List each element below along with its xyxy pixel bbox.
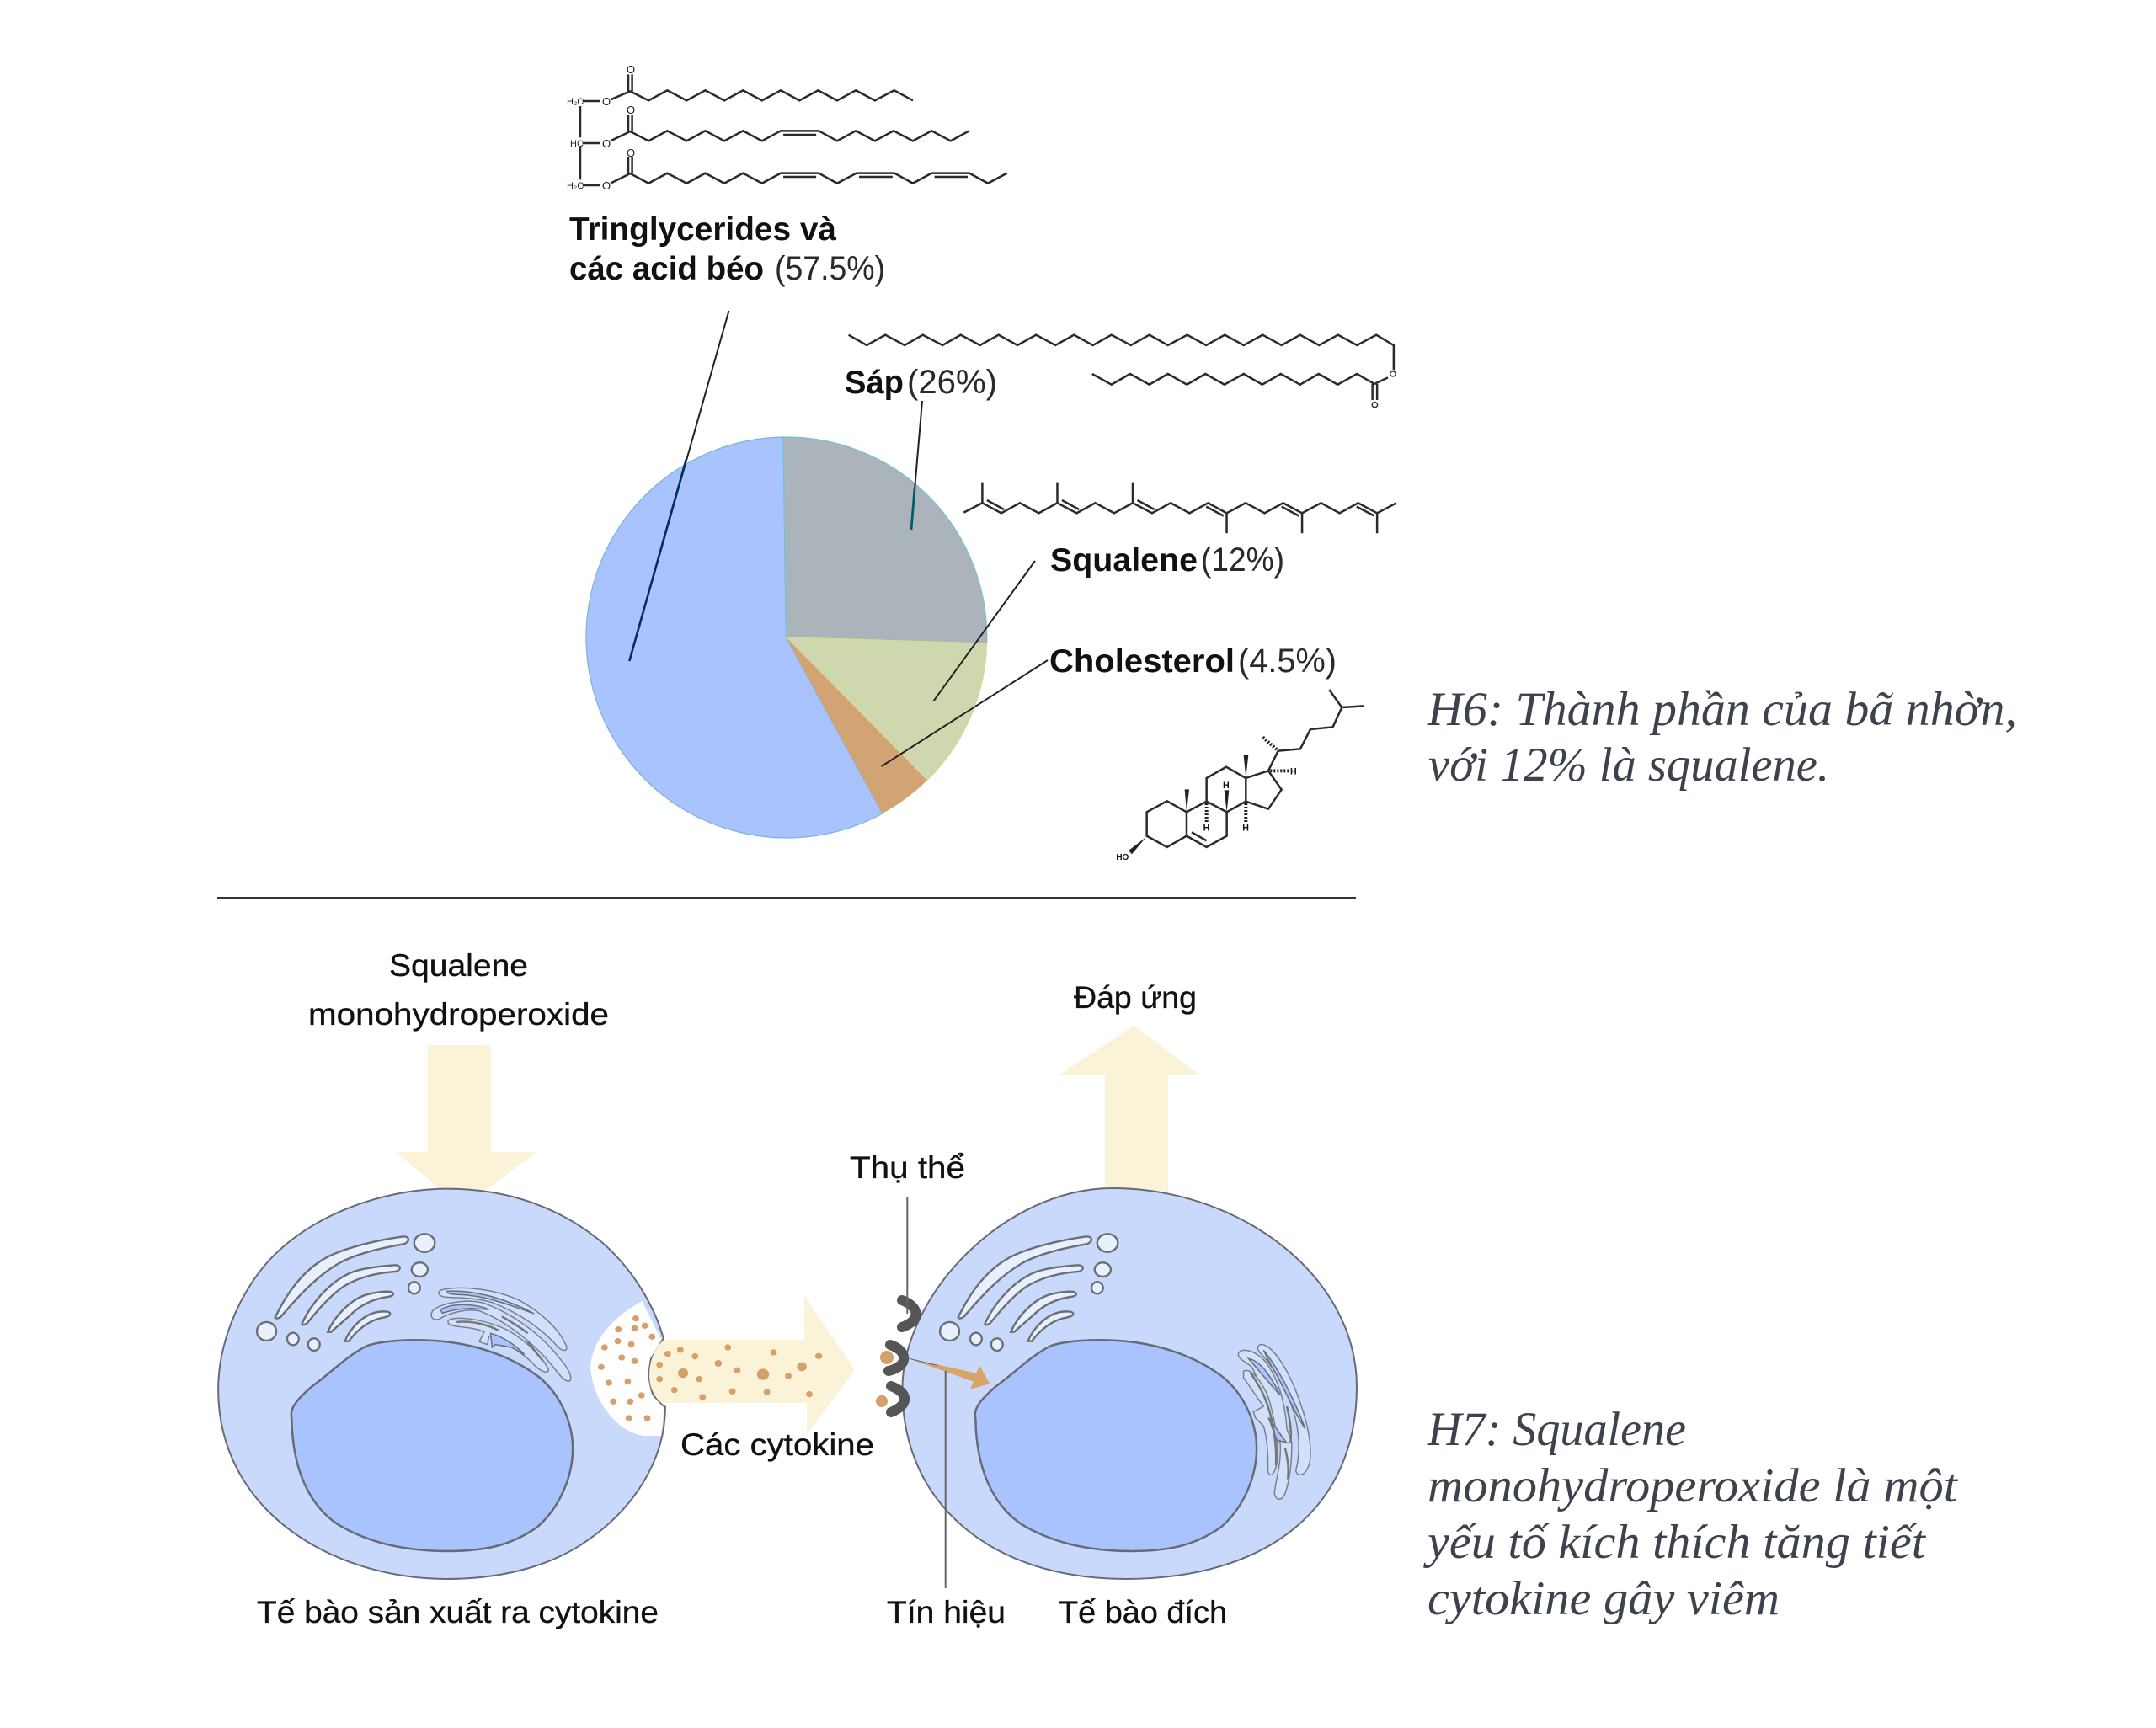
caption: H7: yếu tố kích thích tăng tiết: [1423, 1516, 1926, 1569]
label: wax: (26%): [907, 364, 997, 401]
pointer: signal: [945, 1371, 947, 1588]
label: squalene monohydroperoxide: monohydroperoxide: [308, 997, 609, 1032]
label: wax: [845, 364, 997, 401]
caption: H6: H6: Thành phần của bã nhờn,: [1427, 683, 2017, 736]
molecule: triglyceride: O: [602, 137, 611, 150]
caption: H7: [1423, 1403, 1958, 1625]
molecule: triglyceride: O: [627, 63, 635, 76]
molecule: cholesterol: HO: [1116, 853, 1129, 862]
molecule: squalene: [963, 483, 1396, 533]
caption: H6: với 12% là squalene.: [1428, 739, 1829, 792]
arrow: input down: [396, 1045, 536, 1208]
label: triglycerides: các acid béo: [569, 251, 764, 287]
molecule: cholesterol: H: [1203, 824, 1209, 834]
slice: squalene 12%: [786, 637, 987, 781]
molecule: cholesterol: H: [1242, 824, 1249, 834]
label: target cell: Tế bào đích: [1059, 1595, 1227, 1629]
caption: H6: [1427, 683, 2017, 792]
secretory vesicle region: [590, 1301, 664, 1436]
label: squalene monohydroperoxide: [308, 948, 609, 1032]
molecule: cholesterol: H: [1223, 781, 1230, 791]
slice: cholesterol 4.5%: [786, 637, 927, 813]
arrow: cytokine flow: [648, 1295, 855, 1434]
molecule: triglyceride: O: [602, 95, 611, 108]
cytokine granules: [598, 1315, 822, 1421]
molecule: wax ester: [849, 335, 1396, 408]
label: triglycerides: (57.5%): [775, 250, 885, 287]
molecule: cholesterol: H: [1290, 767, 1297, 777]
cell: target: [902, 1188, 1357, 1579]
label: signal: Tín hiệu: [887, 1595, 1006, 1629]
label: wax: Sáp: [845, 365, 904, 401]
slice: triglycerides 57.5%: [586, 437, 883, 838]
label: triglycerides: Tringlycerides và: [569, 211, 836, 248]
caption: H7: monohydroperoxide là một: [1428, 1459, 1958, 1512]
label: cholesterol: Cholesterol: [1049, 643, 1235, 680]
label: cytokines: Các cytokine: [680, 1427, 874, 1462]
receptors: [889, 1300, 916, 1412]
label: response: Đáp ứng: [1074, 980, 1197, 1015]
nucleus: [975, 1340, 1257, 1551]
label: receptor: Thụ thể: [850, 1150, 965, 1185]
molecule: triglyceride: O: [602, 179, 611, 192]
molecule: triglyceride: O: [627, 147, 635, 159]
endoplasmic reticulum: [257, 1234, 435, 1351]
molecule: cholesterol: [1116, 690, 1364, 862]
endoplasmic reticulum: [940, 1234, 1118, 1351]
arrow: intracellular signal: [906, 1357, 990, 1389]
caption: H7: H7: Squalene: [1427, 1403, 1686, 1456]
molecule: triglyceride: H₂C: [567, 181, 584, 191]
label: squalene: Squalene: [1050, 542, 1198, 579]
label: squalene: [1050, 541, 1284, 579]
molecule: triglyceride: HC: [570, 139, 584, 149]
leader lines: [629, 311, 1048, 766]
arrow: response up: [1059, 1026, 1201, 1196]
molecule: triglyceride: H₂C: [567, 97, 584, 107]
golgi: [1238, 1345, 1310, 1499]
label: triglycerides: [569, 211, 885, 287]
label: cholesterol: [1049, 643, 1337, 680]
pie chart: sebum composition: [586, 437, 987, 838]
nucleus: [291, 1340, 573, 1551]
molecule: triglyceride: [567, 63, 1007, 192]
pointer: receptor: [906, 1197, 908, 1314]
slice: wax 26%: [783, 437, 987, 643]
molecule: triglyceride: O: [627, 104, 635, 116]
caption: H7: cytokine gây viêm: [1428, 1572, 1780, 1625]
cytokines bound to receptors: [876, 1351, 894, 1407]
label: squalene: (12%): [1201, 541, 1284, 579]
label: producer cell: Tế bào sản xuất ra cytokine: [257, 1595, 659, 1629]
golgi: [431, 1288, 571, 1381]
cell: cytokine producer: [218, 1189, 665, 1579]
label: squalene monohydroperoxide: Squalene: [389, 948, 528, 983]
label: cholesterol: (4.5%): [1238, 643, 1337, 680]
